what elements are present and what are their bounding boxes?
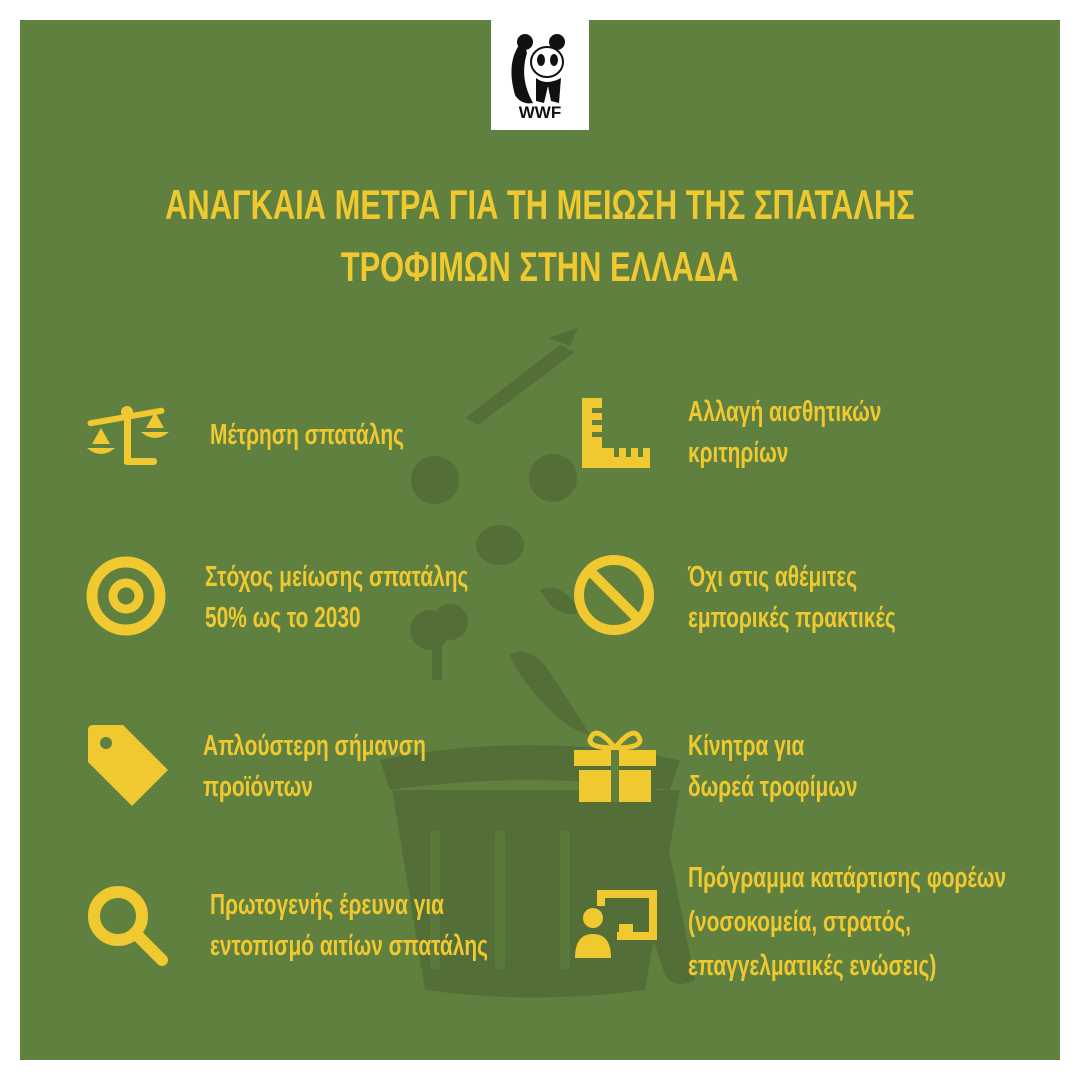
- text: donation incentives: [688, 730, 858, 803]
- title: ΑΝΑΓΚΑΙΑ ΜΕΤΡΑ ΓΙΑ ΤΗ ΜΕΙΩΣΗ ΤΗΣ ΣΠΑΤΑΛΗΣ: [165, 181, 915, 228]
- icon: magnifier: [88, 886, 168, 966]
- text: aesthetic criteria: [688, 396, 881, 469]
- text: aesthetic criteria: Αλλαγή αισθητικών: [688, 396, 881, 428]
- text: no unfair practices: Όχι στις αθέμιτες: [688, 561, 857, 593]
- text: training programme: επαγγελματικές ενώσεις): [688, 950, 936, 982]
- text: training programme: [688, 862, 1006, 982]
- WWF logo: WWF: [519, 103, 561, 122]
- WWF logo: [491, 20, 589, 130]
- text: labeling: Απλούστερη σήμανση: [203, 730, 426, 762]
- text: research: Πρωτογενής έρευνα για: [210, 889, 444, 921]
- text: target: [205, 561, 468, 634]
- text: labeling: προϊόντων: [203, 771, 313, 803]
- text: donation incentives: Κίνητρα για: [688, 730, 804, 762]
- text: target: 50% ως το 2030: [205, 602, 361, 634]
- text: no unfair practices: εμπορικές πρακτικές: [688, 602, 896, 634]
- icon: scale: [87, 406, 169, 465]
- icon: tag: [88, 725, 168, 806]
- text: aesthetic criteria: κριτηρίων: [688, 437, 788, 469]
- icon: ruler: [582, 398, 650, 468]
- icon: gift: [574, 730, 656, 802]
- text: research: [210, 889, 488, 962]
- text: no unfair practices: [688, 561, 896, 634]
- icon: training: [575, 890, 657, 958]
- text: training programme: Πρόγραμμα κατάρτισης φορέων: [688, 862, 1006, 894]
- title: ΤΡΟΦΙΜΩΝ ΣΤΗΝ ΕΛΛΑΔΑ: [341, 243, 739, 290]
- text: measurement: Μέτρηση σπατάλης: [210, 419, 404, 451]
- text: labeling: [203, 730, 426, 803]
- text: training programme: (νοσοκομεία, στρατός,: [688, 906, 911, 938]
- title: [165, 181, 915, 290]
- icon: prohibited: [574, 555, 654, 635]
- icon: target: [86, 556, 166, 636]
- text: research: εντοπισμό αιτίων σπατάλης: [210, 930, 488, 962]
- text: target: Στόχος μείωσης σπατάλης: [205, 561, 468, 593]
- text: donation incentives: δωρεά τροφίμων: [688, 771, 858, 803]
